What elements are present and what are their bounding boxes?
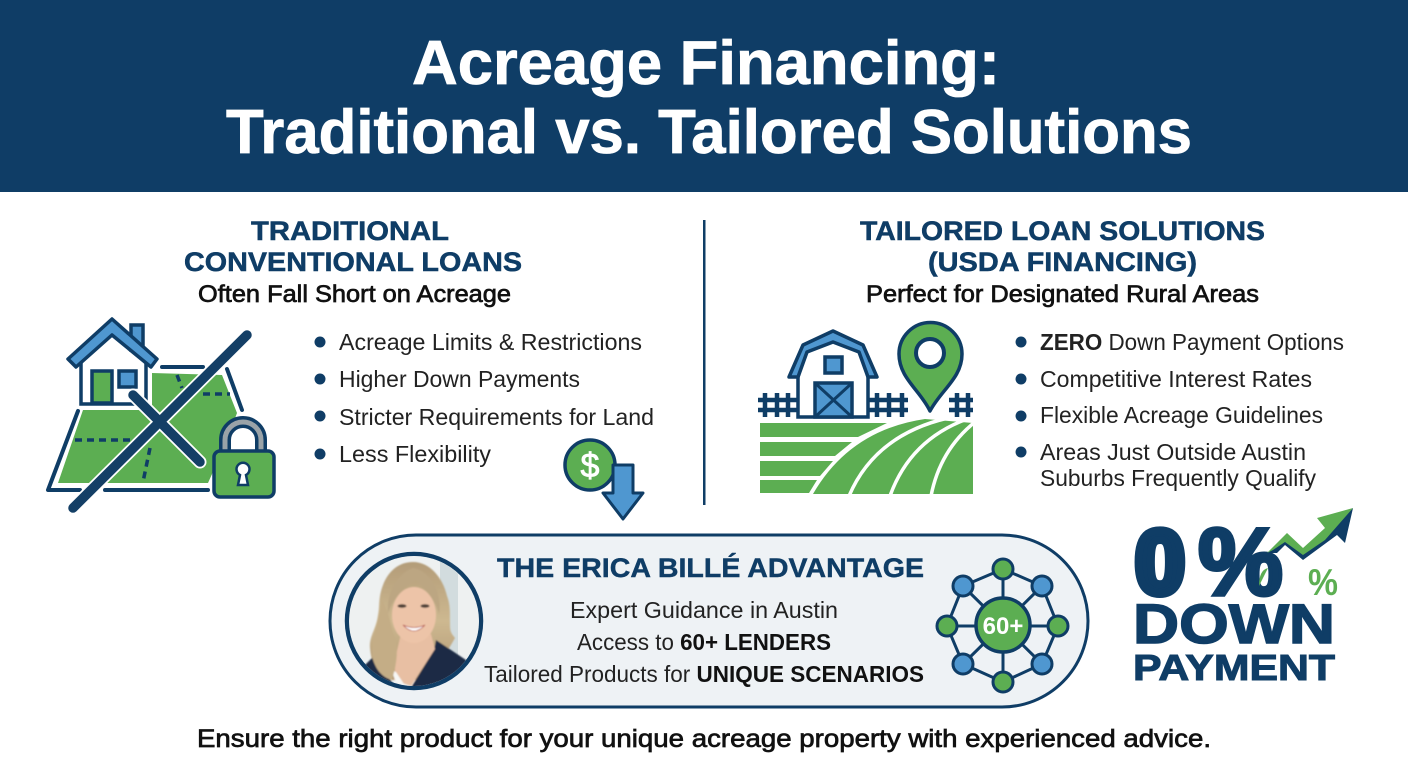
map pin (899, 323, 962, 411)
panel: traditional conventional loans (48, 216, 654, 519)
cross (73, 335, 247, 508)
advantage text: Access to 60+ LENDERS (577, 629, 831, 655)
bullet list: traditional: Less Flexibility (339, 441, 492, 467)
icon: dollar with down arrow: $ (581, 447, 600, 485)
advantage text: Tailored Products for UNIQUE SCENARIOS (484, 661, 924, 687)
heading: traditional: CONVENTIONAL LOANS (184, 247, 522, 277)
bullet list: traditional: Acreage Limits & Restrictions (339, 329, 642, 355)
bullet list: tailored: Flexible Acreage Guidelines (1040, 402, 1323, 428)
icon: house on land with cross and lock (48, 319, 274, 508)
icon: barn, fence, map pin and field (758, 323, 975, 496)
heading: traditional: Often Fall Short on Acreage (198, 281, 511, 308)
footer statement: Ensure the right product for your unique acreage property with experienced advice. (197, 725, 1211, 753)
advantage text: Expert Guidance in Austin (570, 597, 838, 623)
heading: tailored: (USDA FINANCING) (928, 247, 1197, 277)
bullet list: traditional (314, 329, 654, 467)
badge: 0% down payment: % (1308, 562, 1338, 603)
bullet list: tailored: ZERO Down Payment Options (1040, 329, 1344, 355)
advantage text (484, 552, 924, 687)
bullet list: tailored: Suburbs Frequently Qualify (1040, 465, 1316, 491)
panel: tailored loan solutions (758, 216, 1344, 496)
heading: tailored: Perfect for Designated Rural Areas (866, 281, 1259, 308)
panel: the Erica Billé advantage (330, 535, 1088, 707)
divider (703, 220, 706, 505)
padlock (225, 422, 261, 455)
fence (758, 393, 973, 417)
bullet list: traditional: Higher Down Payments (339, 366, 580, 392)
bullet list: tailored: Competitive Interest Rates (1040, 366, 1312, 392)
badge: 0% down payment: 0 (1135, 513, 1185, 613)
bullet list: tailored (1016, 329, 1344, 491)
badge: 0% down payment: DOWN (1133, 592, 1335, 655)
advantage text: THE ERICA BILLÉ ADVANTAGE (497, 552, 924, 583)
title (226, 29, 1192, 167)
badge: 0% down payment (1133, 508, 1353, 688)
house (81, 331, 146, 404)
header banner (0, 0, 1408, 192)
icon: lender network (937, 559, 1068, 692)
field (760, 423, 887, 493)
badge: 0% down payment: % (1198, 509, 1283, 616)
heading: tailored: TAILORED LOAN SOLUTIONS (860, 216, 1265, 246)
icon: rising arrow (1267, 508, 1353, 560)
heading: traditional (184, 216, 522, 308)
title: Traditional vs. Tailored Solutions (226, 98, 1192, 167)
portrait photo (345, 554, 485, 695)
heading: traditional: TRADITIONAL (251, 216, 449, 246)
title: Acreage Financing: (412, 29, 1000, 98)
bullet list: traditional: Stricter Requirements for Land (339, 404, 654, 430)
heading: tailored (860, 216, 1265, 308)
bullet list: tailored: Areas Just Outside Austin (1040, 439, 1306, 465)
icon: lender network: 60+ (983, 613, 1023, 640)
barn (798, 335, 868, 417)
badge: 0% down payment: PAYMENT (1133, 647, 1335, 688)
icon: dollar with down arrow (565, 440, 643, 519)
